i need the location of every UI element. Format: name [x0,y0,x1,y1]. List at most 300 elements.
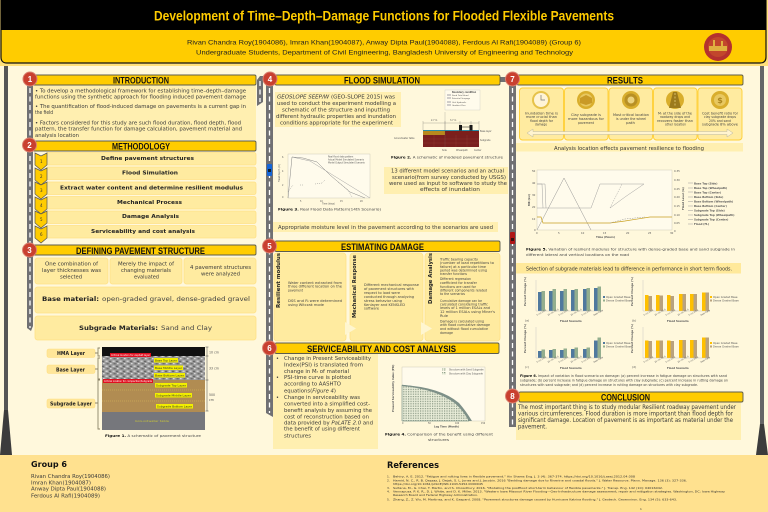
member names [31,474,110,500]
dimensions: 10 cm [209,350,219,354]
layer position text: Subgrade Middle Layer [156,393,192,397]
reference list: Sultana, M., G. Chai, T. Martin, and S. Chowdhury. 2016. "Modelling the postflood short-term behaviour of flexible pavements." J. Transp. Eng. 142 (10): 04016042. [393,486,663,490]
column: damage analysis: Different regression [440,277,471,281]
callout: structures: were analyzed [201,272,240,278]
labels: 5 cm 10 d [643,355,655,364]
bars [648,292,709,311]
base material box: Base material: [42,295,99,303]
bars [538,340,598,358]
axis [643,327,710,358]
column: mechanical response: Different mechanical response [364,283,419,287]
critical location tags: Critical location for Asphalt layer [111,353,151,357]
column: damage analysis: and without flood cumulative [440,327,488,331]
layer position text [155,358,193,408]
brackets [95,348,100,429]
badge 1 [23,72,37,86]
step numbers: 1 [40,159,43,164]
figure 4 caption: structures [428,437,449,442]
icon: dollar coin [711,91,729,109]
card 2 text: Clay subgrade is [571,113,601,117]
bars [645,338,706,358]
icon: university logo [704,33,732,61]
figure 5 caption [526,246,736,257]
step labels: Mechanical Process [117,200,182,206]
labels: Real Data [593,356,604,364]
y axis title: Flood Depth (m) [278,164,281,182]
heading: conclusion [519,392,743,402]
dimensions: cm [209,398,214,402]
column: damage analysis: coefficient for transfer [440,281,478,285]
column: damage analysis: to the scenarios [440,292,465,296]
column: damage analysis [425,253,500,341]
conclusion text: various circumferences. Flood duration is more important than flood depth for [518,412,734,418]
scenario text box: effects of inundation [420,187,480,193]
legend: Dense Graded Base [606,344,632,348]
column: damage analysis: levels of 1 million ESALs and [440,306,490,310]
labels: Percent Change (%) [523,324,527,353]
subgrade materials box [35,316,256,340]
step labels: Define pavement structures [101,156,194,162]
heading: estimating damage: ESTIMATING DAMAGE [341,242,424,252]
heading: introduction: INTRODUCTION [113,76,169,86]
header [0,0,768,66]
flood text box: schematic of the structure and inputting [282,108,390,114]
figure 4 caption: Figure 4. Comparison of the benefit using different [385,432,494,436]
card 5 text [702,112,739,127]
labels: Percent Change (%) [523,277,527,306]
legend [603,341,632,348]
axes labels: 30 [670,231,674,235]
axes labels: 10 [532,217,536,221]
step labels: Serviceability and cost analysis [91,229,195,235]
labels: 5 cm 20 d [688,308,700,317]
badge 7: 7 [510,75,515,84]
structure labels: Side [442,149,447,152]
heading: defining pavement structure [33,245,256,256]
critical location tags: Critical location for compaction/Subgrade [104,379,152,383]
layer position tags [154,358,193,408]
heading: results: RESULTS [607,76,643,86]
chart legend: Actual Model Simulated Scenario [328,158,365,162]
structure labels: Groundwater table [394,137,415,140]
labels: 25 cm 15 d [677,355,690,364]
bar chart b [630,277,739,323]
service text box: data provided by PaLATE 2.0 and [284,420,373,426]
labels: 5 cm 15 d [665,308,677,317]
axis ticks: 5 [300,200,302,203]
card 3 text: is under the wheel [616,117,646,121]
axis titles: 0 [402,422,404,425]
icon: dollar coin: $ [717,96,723,105]
column: resilient modulus: using Witczak mode [288,303,324,307]
chart legend: Real flood data pattern [328,156,354,158]
figure 6 caption: Figure 6. Impact of variation in flood scenario on damage: (a) percent increase in fatigue damage on structures with sand [520,373,728,378]
column: mechanical response: software [364,307,379,311]
affiliation: Undergraduate Students, Department of Civil Engineering, Bangladesh University of Engineering and Technology [196,50,574,56]
boundary legend [445,90,480,110]
labels: Flood Scenario [560,366,582,370]
card 4 text: Mᵣ at the side of the [658,112,692,116]
result cards [520,88,742,140]
badge 6 [262,341,276,355]
labels [630,324,711,370]
axis [536,280,602,311]
chart legend [442,368,484,376]
icon: clock [532,91,550,109]
labels: 25 cm 15 d [570,308,583,317]
heading: estimating damage [275,241,500,252]
intro text: • Factors considered for this study are such flood duration, flood depth, flood [35,120,241,126]
heading: methodology [33,141,256,152]
flood text box: different hydraulic properties and inundation [276,114,396,120]
card 5 text: Cost benefit ratio for [702,112,739,116]
axes labels: 15 [603,231,607,235]
flood text box: GEOSLOPE SEEP/W (GEO-SLOPE 2015) was [277,95,395,101]
analysis location band [516,143,743,152]
panel: defining pavement structure [33,245,256,438]
badge 2: 2 [27,141,32,150]
figure 6 caption: structures with sand subgrade; and (d) percent increase in rutting damage on structures with clay subgrade. [520,382,698,387]
service text box: benefit analysis by assuming the [284,408,373,414]
card 4 text [657,112,693,127]
panel: methodology [33,141,256,243]
icon: wheel [622,91,640,109]
layer position text: Base Middle Layer [155,366,183,370]
badge 8 [506,389,520,403]
member names: Ferdous Al Rafi(1904089) [31,494,100,500]
reference list: Zhang, Z., Z. Wu, M. Martinez, and K. Gaspard. 2008. "Pavement structures damage caused by Hurricane Katrina flooding." J. Geotech. Geoenviron. Eng. 134 (5): 633-643. [393,498,677,502]
heading: conclusion: CONCLUSION [601,392,650,402]
column: resilient modulus: Resilient modulus [276,253,282,308]
panel: estimating damage [274,241,500,341]
chart legend: Base Top (Side) [694,182,717,186]
callout: structures: 4 pavement structures [190,265,251,271]
figure 4: benefit comparison chart [385,365,494,442]
layer position text: Base Bottom Layer [155,373,185,377]
service text box: cost of reconstruction based on [284,414,369,420]
arrow: modulus to response [345,322,356,335]
reference list: Behiry, A. E. 2012. "Fatigue and rutting lives in flexible pavement." Ain Shams Eng. J. 3 (4): 367-374. https://doi.org/10.1016/j.asej.2012.04.008 [393,474,635,478]
step labels: Flood Simulation [122,170,179,176]
axes labels: 0.05 [674,221,680,225]
labels: 5 cm 20 d [581,355,593,364]
chart legend [328,156,365,164]
left lamp post [0,64,12,455]
column: resilient modulus: pavement [288,288,304,292]
chart legend: Base Top (Wheelpath) [694,186,727,190]
figure 5 caption: Figure 5. Variation of resilient modulus for structure with dense-graded base and sand subgrade in [526,246,736,252]
axes labels: 20 [532,205,536,209]
column: mechanical response: Kenlayer and KENSLED [364,303,405,307]
card 1 text: more crucial than [526,115,557,119]
right lamp post [756,64,768,455]
layer position text: Subgrade Bottom Layer [157,404,193,408]
chart legend: Base Bottom (Center) [694,204,727,208]
flood triangle [537,178,591,230]
card 2 text: pavement [578,121,595,125]
chart legend: Structure with Sand Subgrade [449,368,484,372]
callout: layer thickness [35,258,108,284]
reference list: 5. [387,498,390,502]
references heading: References [387,461,439,471]
flood text box: used to conduct the experiment modelling a [277,101,396,107]
heading: results [517,75,743,86]
column: damage analysis: Damage is calculated using [440,320,484,324]
reference list: 4. [387,490,390,494]
member names: Rivan Chandra Roy(1904086) [31,474,110,480]
scenario text box [384,167,508,194]
conclusion text: The most important thing is to study modular Resilient roadway pavement under [517,405,737,411]
base lines [537,184,644,208]
layer label text: HMA Layer [57,351,85,357]
service text box: the benefit of using different [284,427,361,433]
step numbers: 5 [40,217,43,222]
card 4 text: roadway drops and [660,115,690,119]
card 5 text: 20% and sand [709,119,731,123]
structure labels: Wheelpath [456,149,468,152]
service text box: Change in Present Serviceability [284,356,372,362]
axis ticks [282,156,363,206]
footer band [0,455,768,512]
axis ticks: Time (days) [322,202,335,206]
labels: (b) [632,318,636,322]
axis titles: 100 [455,422,460,425]
figure 2: modeled pavement structure [391,90,504,160]
figure 5 caption: different lateral and vertical locations on the road [526,252,630,257]
badge 3 [22,243,36,257]
step labels: Damage Analysis [122,214,179,220]
labels: 25 cm 10 d [547,355,560,364]
step rows [46,152,256,238]
layer image [102,347,205,430]
badge 8: 8 [510,392,515,401]
step numbers: 6 [40,232,43,237]
card 1 text: flood depth for [530,119,553,123]
card 3 text: path [626,121,635,125]
labels: 25 cm 10 d [654,355,667,364]
bar chart d [630,324,739,370]
badge 4: 4 [268,75,273,84]
chart legend: Base Bottom (Wheelpath) [694,200,733,204]
axis ticks: 6 [282,156,284,159]
intro text: pattern, the transfer function for damage calculation, pavement material and [35,126,242,132]
reference list: https://doi.org/10.1061/(ASCE)WR.1943-5452.0000045 [393,482,483,486]
step numbers: 3 [40,188,43,193]
icon: road [666,91,684,109]
labels: (c) [525,365,529,369]
chart legend: Base Top (Center) [694,190,721,194]
service text box: • [276,356,279,362]
labels: Flood Scenario [560,319,582,323]
axis titles [391,365,486,428]
service text box: Change in serviceability was [284,395,360,401]
service text box: equations(Figure 4) [284,388,336,394]
chart legend: Flood (ft.) [694,222,709,226]
footer: group members [31,460,110,500]
road network [27,76,516,427]
step labels: Extract water content and determine resilient modulus [60,186,243,192]
axis ticks: 20 [360,200,363,203]
card 1 text [525,112,558,127]
axes labels: 25 [648,231,652,235]
labels: 5 cm 15 d [558,308,570,317]
column: damage analysis: failure) at a particular time [440,265,486,269]
column: damage analysis: damage [440,331,453,335]
step labels [60,156,243,235]
chart legend: Model Output Simulated Scenario [328,162,365,164]
reference list: 1. [387,474,390,478]
axis titles: Present Serviceability Index (PSI) [391,365,395,412]
column: damage analysis: functions are used for [440,285,477,289]
scenario text box: 13 different model scenarios and an actual [391,168,504,174]
step numbers [40,159,43,237]
badge 3: 3 [27,246,32,255]
step chevrons [35,153,47,243]
figure 4 caption [385,432,494,442]
chart legend: Subgrade Top (Wheelpath) [694,213,735,217]
subgrade lines [537,217,672,223]
authors: Rivan Chandra Roy(1904086), Imran Khan(1904087), Anway Dipta Paul(1904088), Ferdous Al Rafi(1904089) (Group 6) [187,40,581,46]
labels: 5 cm 15 d [665,355,677,364]
heading: flood simulation [275,75,500,86]
legend: Open Graded Base [713,341,738,345]
bars [542,338,601,358]
figure 5: resilient modulus chart [526,169,736,257]
axis ticks: 15 [340,200,343,203]
boundary legend: Fixed Total Head [452,94,469,97]
axis titles: 50 [428,422,431,425]
labels [523,277,604,323]
structure labels [394,119,492,152]
axis titles: Log Time (Month) [434,424,459,428]
labels: 5 cm 15 d [558,355,570,364]
badge 6: 6 [267,344,272,353]
reference list [387,474,725,502]
card 3 text [613,113,649,125]
boundary legend: Unit Hydraulic [452,101,466,104]
service text box: Index(PSI) is translated from [284,363,363,369]
axes labels: MR (ksi) [527,194,531,206]
labels: 5 cm 20 d [581,308,593,317]
badge 7 [506,72,520,86]
structure labels: 2.7 m [431,119,437,122]
callout: materials [110,258,182,284]
panel: serviceability and cost analysis [273,343,499,449]
structure labels: Center [474,149,481,152]
service text box: converted into a simplified cost- [284,401,370,407]
axes labels: 20 [626,231,630,235]
legend [710,341,739,348]
legend: Open Graded Base [713,295,738,299]
column: mechanical response: respect to load were [364,291,400,295]
column: damage analysis: (number of load repetitions to [440,261,494,265]
axes labels: 10 [581,231,585,235]
scenario text box: were used as input to software to study the [389,181,507,187]
reference list: 2. [387,478,390,482]
icon: clay soil [577,91,595,109]
figure 6 caption [520,373,729,387]
axes labels: Flood Level (m) [681,187,685,210]
column: mechanical response: of pavement structures with [364,287,414,291]
legend: Dense Graded Base [713,344,739,348]
structure labels: 3.7 m [450,119,456,122]
column: mechanical response [350,253,423,341]
intro text: • To develop a methodological framework for establishing time–depth–damage [35,88,246,94]
benefit area [402,385,469,421]
title: Development of Time–Depth–Damage Functions for Flooded Flexible Pavements [154,8,614,24]
axes labels: 0.15 [674,204,680,208]
chart legend: Subgrade Top (Side) [694,208,725,212]
bars [648,338,709,358]
panel: results [516,75,743,387]
flood curves [288,157,370,198]
figure 6 caption: subgrade; (b) percent increase in fatigue damage on structures with clay subgrade; (c) percent increase in rutting damage on [520,378,729,383]
column: mechanical response: conducted through analyzing [364,295,414,299]
labels: (a) [525,318,529,322]
service text box: according to AASHTO [284,382,342,388]
footer: references [387,461,725,511]
card 5 text: subgrade 8% above [702,123,738,127]
layer label text [50,351,92,408]
bars [538,288,598,311]
structure labels: Subgrade [480,139,491,142]
groundwater label: Groundwater table [135,419,169,423]
axes labels [527,169,685,239]
service text box: structures [284,434,311,440]
labels: 25 cm 15 d [570,355,583,364]
labels: Flood Scenario [667,319,689,323]
panel: flood simulation [273,75,508,232]
callout: materials: Merely the impact of [118,262,174,268]
axes labels: 0.35 [674,169,680,173]
column: damage analysis: Cumulative damage can be [440,299,482,303]
column: resilient modulus [274,253,346,341]
axes labels: 40 [532,181,536,185]
card 2 text: more hazardous for [568,117,605,121]
boundary legend: Boundary condition [452,91,477,94]
labels: 25 cm 10 d [654,308,667,317]
panel: conclusion [516,392,743,440]
bar chart c [523,324,632,370]
labels: 25 cm 15 d [677,308,690,317]
callout: structures [184,258,256,284]
labels: 5 cm 10 d [536,308,548,317]
column: damage analysis: Rule [440,314,448,318]
boundary legend: Potential Seepage [452,97,471,100]
labels: Percent Change (%) [630,277,634,306]
axes labels: Time (Hours) [596,235,615,239]
figure 3 caption: Figure 3. Real Flood Data Pattern(14th Scenario) [278,206,382,212]
labels: (d) [632,365,636,369]
page number: 1 [640,507,642,511]
base material box [35,287,256,313]
axis ticks: 10 [320,200,323,203]
axes labels: 0.10 [674,213,680,217]
badge 5 [262,239,276,253]
material selection band: Selection of subgrade materials lead to difference in performance in short term floods. [526,266,732,272]
axes labels: 0 [536,231,538,235]
column: mechanical response: stress behavior using [364,299,402,303]
column: damage analysis: with flood cumulative damage [440,323,490,327]
axes labels: 0.30 [674,178,680,182]
axes labels: 0.25 [674,187,680,191]
labels: Real Data [593,309,604,317]
member names: Anway Dipta Paul(1904088) [31,486,106,492]
axes labels: 5 [558,231,560,235]
service text box [273,353,378,449]
card 5 text: clay subgrade drops [704,115,736,119]
base material box: open-graded gravel, dense-graded gravel [102,295,250,303]
